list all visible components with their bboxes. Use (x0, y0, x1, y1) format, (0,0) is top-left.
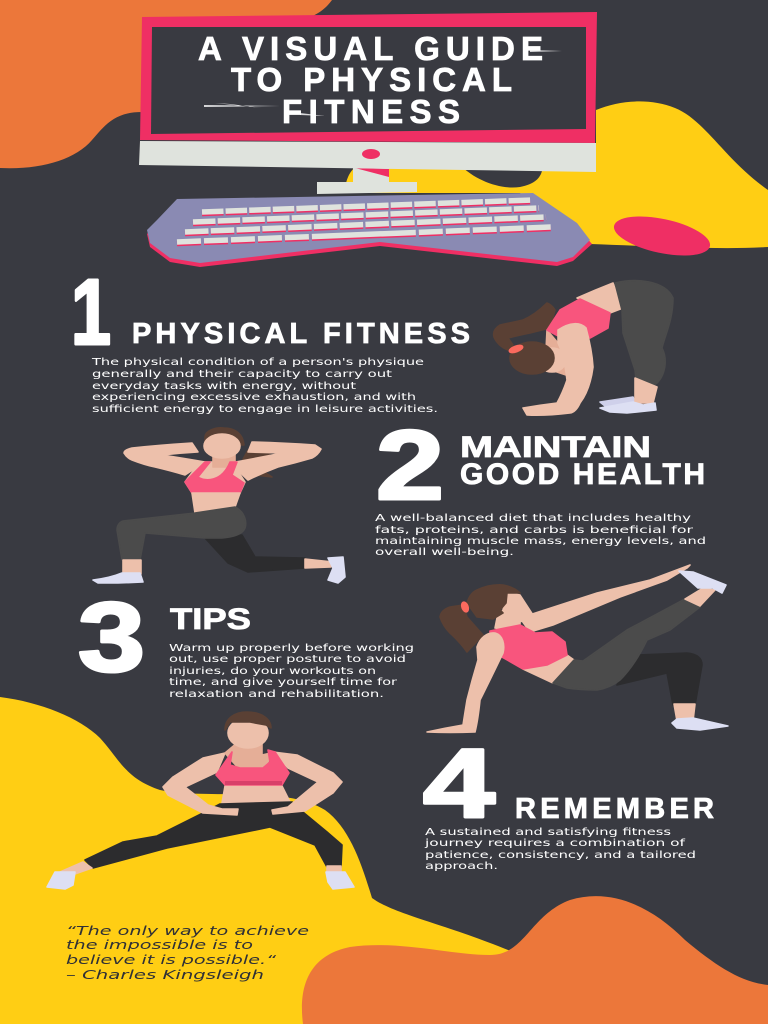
figure: wide stance pose (47, 712, 354, 889)
body text 1: generally and their capacity to carry out (92, 369, 392, 380)
body text 4: approach. (425, 861, 498, 872)
body text 3 (169, 643, 414, 700)
figure: downward dog pose (494, 281, 673, 415)
body text 1: sufficient energy to engage in leisure activities. (92, 404, 438, 415)
monitor frame (140, 12, 597, 143)
background blob: yellow bottom left (0, 697, 520, 1024)
keyboard (147, 193, 592, 267)
body text 4: journey requires a combination of (423, 838, 686, 849)
number 2: 2 (376, 410, 444, 520)
heading 2 (460, 431, 705, 491)
body text 3: out, use proper posture to avoid (169, 654, 406, 665)
background blob: orange top left (0, 0, 332, 168)
number 1: 1 (71, 260, 111, 364)
title: TO PHYSICAL (231, 61, 512, 98)
background blob: orange bottom right (302, 896, 768, 1024)
quote: “The only way to achieve (66, 923, 310, 938)
body text 2: A well-balanced diet that includes healthy (375, 513, 691, 524)
quote (66, 923, 310, 982)
quote: – Charles Kingsleigh (66, 967, 264, 982)
body text 1 (90, 357, 438, 415)
body text 2: fats, proteins, and carbs is beneficial for (375, 525, 693, 536)
section 1: physical fitness (71, 260, 470, 415)
body text 3: time, and give yourself time for (169, 677, 397, 688)
section 2: maintain good health (375, 410, 706, 558)
heading 2: MAINTAIN (460, 431, 651, 464)
monitor illustration (139, 12, 597, 194)
body text 1: experiencing excessive exhaustion, and with (92, 392, 416, 403)
body text 2: maintaining muscle mass, energy levels, and (375, 536, 706, 547)
section 3: tips (78, 582, 414, 700)
heading 4: REMEMBER (515, 793, 714, 825)
body text 1: everyday tasks with energy, without (92, 381, 356, 392)
decorative red ellipse (611, 209, 713, 263)
body text 2 (375, 513, 706, 558)
body text 3: Warm up properly before working (169, 643, 414, 654)
figure: lunge pose (93, 428, 345, 583)
body text 3: relaxation and rehabilitation. (169, 689, 384, 700)
monitor stand (317, 168, 417, 194)
heading 1: PHYSICAL FITNESS (132, 318, 470, 350)
body text 3: injuries, do your workouts on (169, 666, 376, 677)
number 3: 3 (78, 582, 145, 692)
keys (177, 200, 552, 244)
title: A VISUAL GUIDE (198, 30, 543, 67)
quote: the impossible is to (66, 937, 254, 952)
heading 3: TIPS (170, 603, 251, 636)
figure: seated reach pose (427, 565, 728, 732)
body text 4 (423, 827, 696, 872)
heading 2: GOOD HEALTH (460, 458, 705, 491)
monitor button (362, 149, 380, 159)
body text 4: A sustained and satisfying fitness (425, 827, 671, 838)
background blob: yellow upper right (345, 101, 768, 248)
title: FITNESS (282, 93, 460, 130)
section 4: remember (423, 728, 714, 872)
body text 1: The physical condition of a person's physique (90, 357, 424, 368)
monitor chin (139, 141, 596, 172)
title (198, 30, 562, 130)
body text 4: patience, consistency, and a tailored (425, 850, 696, 861)
body text 2: overall well-being. (375, 547, 514, 558)
number 4: 4 (423, 728, 495, 838)
quote: believe it is possible.“ (66, 952, 277, 967)
